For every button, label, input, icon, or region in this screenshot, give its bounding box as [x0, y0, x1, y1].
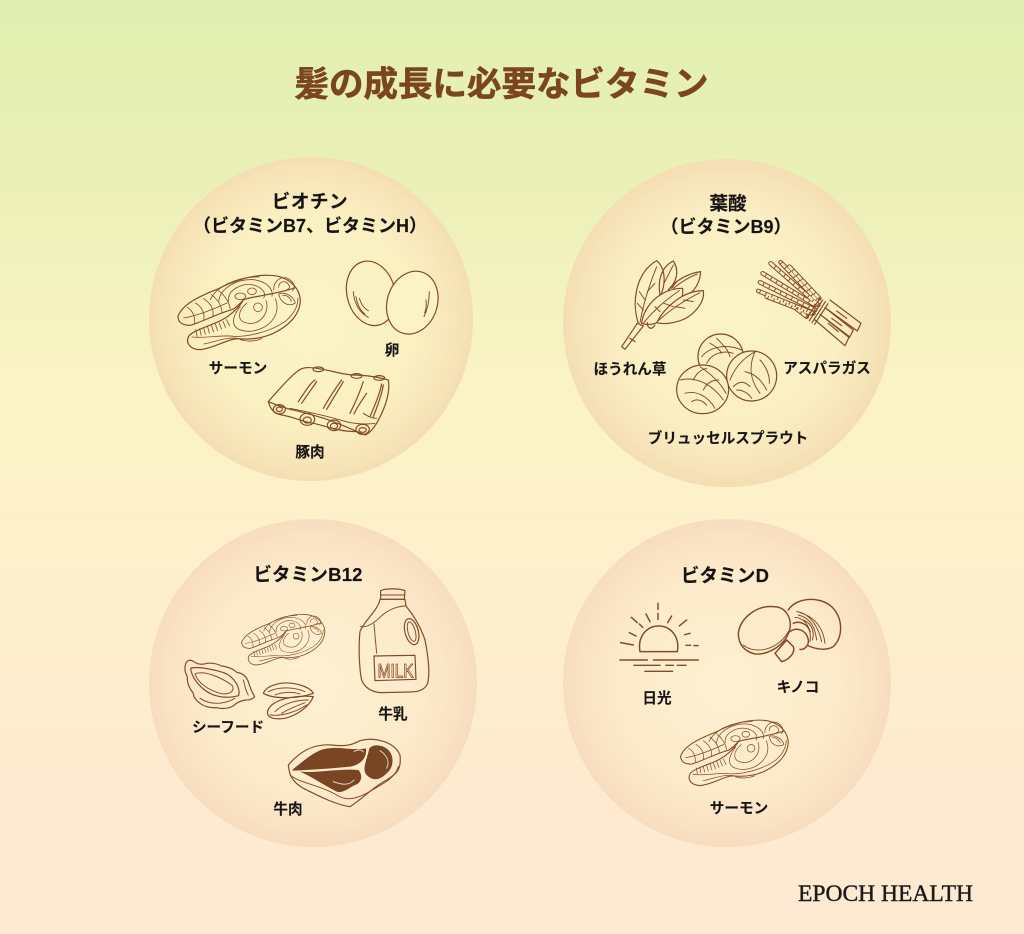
- label: mushroom: キノコ: [777, 680, 819, 696]
- label: seafood: シーフード: [192, 720, 264, 736]
- label: beef: 牛肉: [273, 801, 303, 818]
- icon: oyster and mussel: [185, 660, 313, 719]
- icon: milk jug: [359, 589, 429, 693]
- label: spinach: ほうれん草: [594, 361, 666, 378]
- heading: folate: 葉酸: [709, 193, 747, 214]
- label: brussels sprouts: ブリュッセルスプラウト: [648, 429, 808, 447]
- label: milk on jug: MILK: [378, 662, 414, 683]
- panel: biotin: [149, 157, 473, 481]
- icon: pork ribs: [268, 367, 389, 435]
- icon: brussels sprouts: [677, 334, 777, 414]
- heading: biotin: （ビタミンB7、ビタミンH）: [193, 215, 427, 236]
- icon: spinach: [622, 261, 704, 349]
- icon: asparagus: [758, 262, 861, 346]
- label: salmon: サーモン: [710, 800, 768, 817]
- icon: mushrooms: [738, 599, 841, 662]
- label: milk: 牛乳: [378, 706, 408, 723]
- icon: salmon: [242, 614, 325, 665]
- label: egg: 卵: [385, 342, 399, 359]
- heading: folate: （ビタミンB9）: [660, 216, 792, 237]
- panel: vitamin d: [563, 519, 891, 847]
- icon: sun: [620, 603, 698, 671]
- heading: vitamin b12: ビタミンB12: [253, 564, 363, 585]
- icon: steak: [288, 739, 400, 807]
- heading: vitamin d: ビタミンD: [681, 565, 769, 586]
- heading: biotin: ビオチン: [272, 191, 348, 212]
- panel: folate: [563, 159, 891, 487]
- label: salmon: サーモン: [209, 360, 267, 377]
- label: sunlight: 日光: [642, 690, 672, 707]
- icon: salmon: [178, 275, 300, 350]
- logo: Epoch Health: EPOCH HEALTH: [798, 881, 973, 906]
- icon: eggs: [340, 256, 446, 341]
- label: pork: 豚肉: [295, 444, 325, 461]
- icon: salmon: [681, 720, 788, 786]
- label: asparagus: アスパラガス: [783, 360, 871, 377]
- panel: vitamin b12: [149, 519, 477, 847]
- title: 髪の成長に必要なビタミン: [294, 66, 708, 104]
